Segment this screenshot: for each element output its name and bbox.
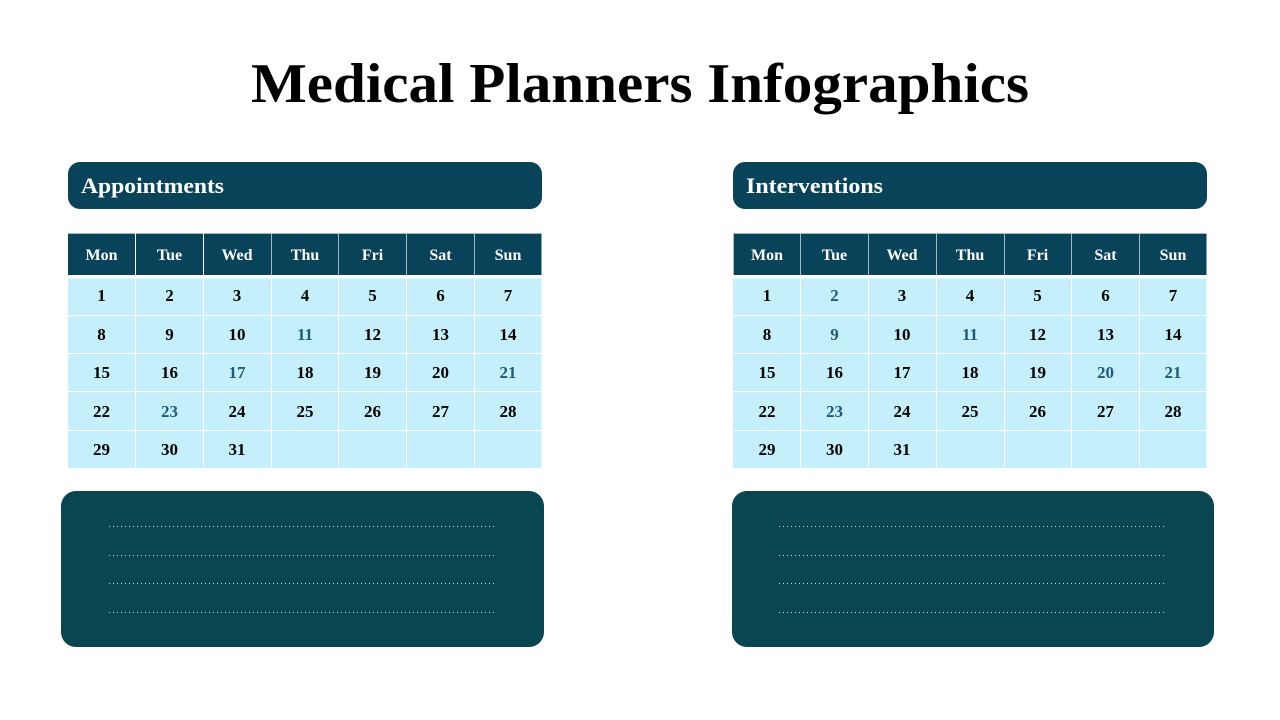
- notes panel: appointments: [61, 491, 544, 647]
- date grid: 23: [161, 402, 178, 421]
- date grid: 1: [763, 286, 771, 305]
- title: Medical Planners Infographics: [251, 53, 1029, 115]
- date grid: 14: [1164, 325, 1182, 344]
- date grid: 30: [161, 440, 178, 459]
- date grid: 17: [894, 363, 911, 382]
- weekday header row: Thu: [956, 247, 984, 264]
- date grid: 18: [962, 363, 978, 382]
- heading: appointments: Appointments: [81, 173, 224, 198]
- date grid: [68, 278, 542, 468]
- weekday header row: Tue: [157, 247, 182, 264]
- weekday header row: [733, 233, 1206, 275]
- weekday header row: Thu: [291, 247, 319, 264]
- date grid: 3: [233, 286, 241, 305]
- calendar: interventions: [733, 233, 1206, 468]
- date grid: 7: [1169, 286, 1178, 305]
- heading: appointments: [68, 162, 542, 209]
- date grid: 30: [826, 440, 843, 459]
- date grid: 20: [1097, 363, 1114, 382]
- date grid: 12: [364, 325, 381, 344]
- date grid: 31: [894, 440, 910, 459]
- date grid: 25: [296, 402, 314, 421]
- calendar: appointments: [68, 233, 542, 468]
- weekday header row: Wed: [221, 247, 253, 264]
- weekday header row: Mon: [86, 247, 118, 264]
- heading: interventions: Interventions: [746, 173, 883, 198]
- date grid: 17: [228, 363, 246, 382]
- date grid: 29: [93, 440, 110, 459]
- date grid: 5: [1033, 286, 1042, 305]
- date grid: 9: [165, 325, 174, 344]
- date grid: 11: [297, 325, 313, 344]
- date grid: 16: [161, 363, 178, 382]
- weekday header row: Wed: [886, 247, 918, 264]
- date grid: 27: [432, 402, 450, 421]
- weekday header row: [68, 233, 542, 275]
- date grid: 22: [93, 402, 110, 421]
- date grid: 31: [228, 440, 246, 459]
- date grid: 13: [432, 325, 449, 344]
- weekday header row: Fri: [1027, 247, 1049, 264]
- date grid: 15: [758, 363, 776, 382]
- date grid: 4: [966, 286, 975, 305]
- date grid: 8: [97, 325, 106, 344]
- date grid: 8: [763, 325, 771, 344]
- date grid: 29: [758, 440, 776, 459]
- date grid: 26: [364, 402, 381, 421]
- date grid: 22: [758, 402, 776, 421]
- date grid: 26: [1029, 402, 1046, 421]
- weekday header row: Tue: [822, 247, 847, 264]
- date grid: 3: [898, 286, 906, 305]
- date grid: 9: [830, 325, 839, 344]
- date grid: 6: [1101, 286, 1110, 305]
- panel: interventions: [732, 162, 1214, 647]
- date grid: 19: [364, 363, 381, 382]
- date grid: 12: [1029, 325, 1046, 344]
- date grid: [733, 278, 1206, 468]
- notes panel: interventions: [732, 491, 1214, 647]
- date grid: 13: [1097, 325, 1114, 344]
- date grid: 23: [826, 402, 843, 421]
- date grid: 2: [830, 286, 839, 305]
- heading: interventions: [733, 162, 1207, 209]
- date grid: 27: [1097, 402, 1114, 421]
- weekday header row: Sun: [1160, 247, 1186, 264]
- date grid: 10: [894, 325, 910, 344]
- date grid: 16: [826, 363, 843, 382]
- date grid: 10: [228, 325, 246, 344]
- date grid: 4: [301, 286, 310, 305]
- date grid: 21: [500, 363, 516, 382]
- date grid: 1: [97, 286, 106, 305]
- weekday header row: Sun: [495, 247, 521, 264]
- date grid: 25: [962, 402, 978, 421]
- date grid: 7: [504, 286, 513, 305]
- date grid: 15: [93, 363, 110, 382]
- date grid: 5: [368, 286, 377, 305]
- date grid: 6: [436, 286, 445, 305]
- weekday header row: Mon: [751, 247, 783, 264]
- panel: appointments: [61, 162, 544, 647]
- date grid: 20: [432, 363, 449, 382]
- weekday header row: Sat: [429, 247, 452, 264]
- date grid: 28: [500, 402, 516, 421]
- date grid: 14: [500, 325, 517, 344]
- date grid: 11: [962, 325, 978, 344]
- date grid: 24: [894, 402, 911, 421]
- date grid: 2: [165, 286, 174, 305]
- date grid: 21: [1164, 363, 1182, 382]
- weekday header row: Sat: [1094, 247, 1117, 264]
- date grid: 28: [1164, 402, 1182, 421]
- date grid: 19: [1029, 363, 1046, 382]
- date grid: 24: [228, 402, 246, 421]
- date grid: 18: [296, 363, 314, 382]
- weekday header row: Fri: [362, 247, 384, 264]
